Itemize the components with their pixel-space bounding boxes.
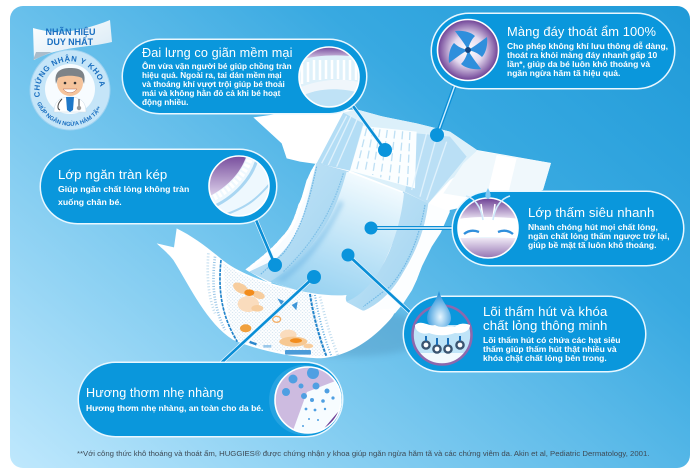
ribbon text: NHÃN HIỆU	[45, 26, 96, 37]
icon: pinwheel	[436, 18, 500, 82]
pointer: double leak guard	[256, 220, 282, 272]
text: absorption layer: ngăn chất lỏng thấm ngược trở lại,	[528, 231, 670, 241]
heading: core: Lõi thấm hút và khóa	[483, 304, 607, 319]
panel: fast absorption layer	[453, 192, 683, 265]
pointer: absorbent core	[342, 248, 414, 316]
icon: leak guard close-up	[208, 155, 270, 217]
waistband pleats	[317, 109, 477, 203]
left leg cuff	[250, 163, 348, 282]
heading: leak guard: Lớp ngăn tràn kép	[58, 167, 167, 182]
text: waistband: mái và không hằn đỏ cả khi bé hoạt	[142, 89, 280, 98]
text: leak guard: xuống chân bé.	[58, 196, 122, 206]
pointer: breathable backsheet	[430, 85, 455, 142]
doctor	[54, 68, 86, 112]
text: waistband: động nhiều.	[142, 98, 188, 107]
diaper shadow	[270, 310, 430, 357]
heading: core: chất lỏng thông minh	[483, 318, 607, 333]
icon: fragrance close-up	[269, 365, 342, 435]
pointer: waistband	[345, 95, 392, 157]
text: backsheet	[507, 41, 668, 78]
icon: absorption diagram	[457, 188, 519, 259]
diaper back and side wings	[247, 109, 551, 313]
text: absorption layer: giúp bề mặt tã luôn khô thoáng.	[528, 240, 656, 250]
heading: backsheet: Màng đáy thoát ẩm 100%	[507, 24, 656, 39]
panel: elastic waistband	[123, 40, 366, 113]
text: backsheet: ngăn ngừa hăm tã hiệu quả.	[507, 68, 620, 78]
heading: absorption layer: Lớp thấm siêu nhanh	[528, 205, 654, 220]
text: backsheet: Cho phép không khí lưu thông dễ dàng,	[507, 41, 668, 51]
text: core	[483, 335, 620, 363]
seal centre	[45, 64, 95, 114]
panel: breathable backsheet	[432, 14, 674, 88]
text: waistband: và thoáng khí vượt trội giúp bé thoải	[142, 80, 285, 89]
seal text bottom: GIÚP NGĂN NGỪA HĂM TÃ**	[38, 102, 100, 126]
absorbent core	[270, 172, 404, 302]
text: waistband: Ôm vừa vặn người bé giúp chồng tràn	[142, 62, 292, 71]
text: absorption layer: Nhanh chóng hút mọi chất lỏng,	[528, 222, 658, 232]
icon: liquid drop and granules	[411, 291, 473, 366]
footnote: **Với công thức khô thoáng và thoát ẩm, HUGGIES® được chứng nhận y khoa giúp ngăn ngừa hăm tã và các chứng viêm da. Akin et al, Pediatric Dermatology, 2001.	[77, 449, 649, 458]
text: leak guard: Giúp ngăn chất lỏng không tràn	[58, 184, 189, 194]
right wing texture	[443, 151, 551, 200]
text: fragrance: Hương thơm nhẹ nhàng, an toàn cho da bé.	[86, 403, 263, 413]
pointer: fragrance	[220, 270, 321, 364]
front panel stripes	[208, 253, 338, 357]
ribbon text line 2: DUY NHẤT	[47, 37, 94, 47]
left frill	[248, 165, 323, 282]
diaper body artwork	[157, 109, 551, 358]
ribbon	[33, 20, 112, 60]
text: backsheet: lần*, giúp da bé luôn khô thoáng và	[507, 59, 650, 69]
panel: double leak guard	[41, 150, 276, 223]
badge: doctor certification	[30, 20, 112, 130]
right leg cuff	[347, 192, 428, 311]
front panel	[157, 228, 395, 358]
text: core: Lõi thấm hút có chứa các hạt siêu	[483, 335, 620, 345]
seal text top: CHỨNG NHẬN Y KHOA	[34, 54, 105, 97]
panel: gentle fragrance	[79, 363, 342, 436]
right white frill	[367, 203, 450, 313]
text: leak guard	[58, 184, 189, 206]
text: core: khóa chặt chất lỏng bên trong.	[483, 353, 607, 363]
heading: fragrance: Hương thơm nhẹ nhàng	[86, 386, 224, 400]
text: core: thấm giúp thấm hút thật nhiều và	[483, 344, 617, 354]
seal ring	[30, 50, 110, 130]
heading: core	[483, 304, 608, 333]
pointer: fast absorb layer	[364, 222, 460, 234]
icon: waistband close-up	[298, 46, 360, 108]
text: waistband: hiệu quả. Ngoài ra, tai dán mềm mại	[142, 71, 282, 80]
bear prints	[231, 280, 313, 355]
heading: waistband: Đai lưng co giãn mềm mại	[142, 46, 293, 60]
text: absorption layer	[528, 222, 670, 250]
text: backsheet: thoát ra khỏi màng đáy nhanh gấp 10	[507, 50, 657, 60]
text: waistband	[142, 62, 292, 107]
panel: absorbent core	[404, 297, 645, 371]
